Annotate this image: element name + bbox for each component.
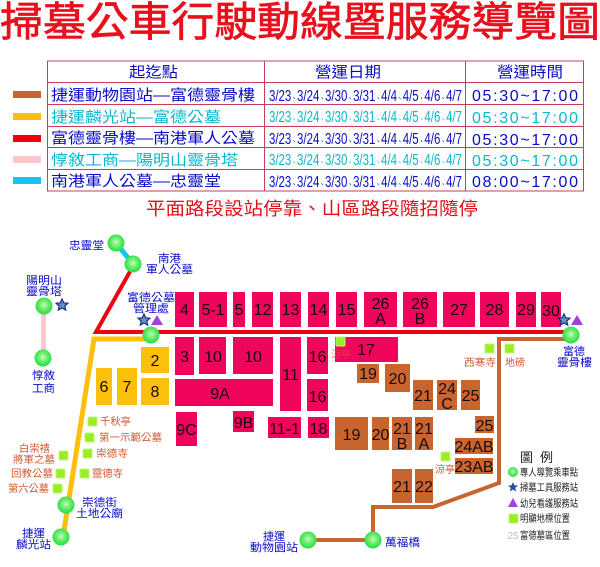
cemetery sections: pink: 3 <box>180 349 189 366</box>
landmark labels: 第六公墓 <box>8 482 49 495</box>
stop labels: 軍人公墓 <box>146 263 193 276</box>
cemetery sections: pink: 9B <box>234 415 253 432</box>
map legend <box>507 450 578 542</box>
cemetery sections: brown: 22 <box>415 479 433 496</box>
table row 1: 05:30~17:00 <box>472 88 578 105</box>
subtitle note: 平面路段設站停靠、山區路段隨招隨停 <box>146 199 478 219</box>
cemetery sections: pink: 4 <box>180 302 189 319</box>
cemetery sections: brown: 25 <box>476 418 494 435</box>
stop labels: 靈骨樓 <box>557 355 592 369</box>
route colour legend <box>13 91 41 184</box>
cemetery sections: pink: 26 <box>411 296 429 313</box>
cemetery sections: pink: 26 <box>372 296 390 313</box>
legend icon: section number: 25 <box>507 531 519 542</box>
landmark labels: 靈德寺 <box>92 467 123 480</box>
stop labels: 工商 <box>32 381 55 395</box>
cemetery sections: yellow: 8 <box>151 384 160 401</box>
table row 1 <box>51 86 578 105</box>
cemetery sections: pink: 16 <box>309 349 326 366</box>
cemetery sections: brown: 20 <box>389 371 406 388</box>
landmark labels: 千秋亭 <box>100 415 131 428</box>
stop labels: 富德公墓 <box>127 290 175 304</box>
legend icon: landmark <box>509 514 518 523</box>
landmark labels: 地磅 <box>505 356 525 369</box>
cemetery sections: brown: 20 <box>372 427 390 444</box>
table row 3: 3/23、3/24、3/30、3/31、4/4、4/5、4/6、4/7 <box>269 131 462 148</box>
service icons: stars and triangles <box>56 299 583 325</box>
cemetery sections: yellow <box>96 347 169 405</box>
table row 3 <box>51 129 578 149</box>
cemetery sections: pink: 10 <box>204 349 222 366</box>
cemetery sections: brown: 24AB <box>454 439 494 456</box>
cemetery sections: pink: 9A <box>210 386 230 403</box>
cemetery sections: pink: A <box>375 311 386 328</box>
stop labels: 靈骨塔 <box>26 285 62 298</box>
cemetery sections: yellow: 7 <box>123 379 132 396</box>
stop labels: 動物園站 <box>250 540 298 554</box>
table row 4: 惇敘工商—陽明山靈骨塔 <box>51 151 238 169</box>
stop labels: 土地公廟 <box>76 506 123 520</box>
table header: 營運時間 <box>497 64 563 81</box>
cemetery sections: pink <box>175 292 561 446</box>
cemetery sections: pink: 29 <box>517 302 535 319</box>
cemetery sections: pink: 11-1 <box>269 421 300 438</box>
cemetery sections: pink: 15 <box>338 302 356 319</box>
cemetery sections: yellow: 2 <box>151 353 160 370</box>
stop labels: 管理處 <box>133 301 169 315</box>
table header: 起迄點 <box>129 64 178 81</box>
landmark labels: 回教公墓 <box>11 467 53 480</box>
cemetery sections: pink: 14 <box>310 302 328 319</box>
cemetery sections: brown: 25 <box>462 388 480 405</box>
stop labels <box>16 239 592 554</box>
cemetery sections: pink: 28 <box>486 302 504 319</box>
legend text: section: 富德墓區位置 <box>520 529 570 542</box>
route lines <box>44 243 565 540</box>
cemetery sections: pink: 16 <box>309 389 326 406</box>
table header <box>129 64 563 81</box>
cemetery sections: brown: 21 <box>393 421 411 438</box>
cemetery sections: pink: 12 <box>254 302 272 319</box>
landmark labels: 第一示範公墓 <box>99 431 162 444</box>
cemetery sections: pink: 27 <box>450 302 468 319</box>
legend heading: 圖 例 <box>520 450 553 465</box>
cemetery sections: pink: 13 <box>282 302 300 319</box>
legend icon: stop <box>508 467 518 477</box>
table row 5: 08:00~17:00 <box>472 174 578 191</box>
cemetery sections: brown: A <box>419 436 430 453</box>
landmark labels: 崇德寺 <box>96 447 128 460</box>
cemetery sections: brown: 21 <box>393 479 411 496</box>
table row 2: 捷運麟光站—富德公墓 <box>51 108 221 126</box>
landmark labels: 將軍之墓 <box>13 453 55 466</box>
cemetery sections: pink: 30 <box>542 303 560 320</box>
cemetery sections: pink: 10 <box>244 349 262 366</box>
cemetery sections: pink: 5-1 <box>201 302 225 319</box>
table row 4: 3/23、3/24、3/30、3/31、4/4、4/5、4/6、4/7 <box>269 152 462 169</box>
cemetery sections: brown: 24 <box>438 381 456 398</box>
legend icon: star <box>508 482 518 491</box>
stop labels: 麟光站 <box>16 537 51 551</box>
table row 5: 南港軍人公墓—忠靈堂 <box>51 173 221 190</box>
legend text: triangle: 幼兒看護服務站 <box>520 497 578 510</box>
stop labels: 崇德街 <box>82 495 117 509</box>
cemetery sections: pink: 17 <box>357 342 375 359</box>
cemetery sections: brown <box>335 364 494 503</box>
landmark labels <box>8 348 525 495</box>
table row 2: 05:30~17:00 <box>472 110 578 127</box>
legend text: landmark: 明顯地標位置 <box>520 512 570 525</box>
table row 3: 富德靈骨樓—南港軍人公墓 <box>51 129 255 147</box>
table row 5: 3/23、3/24、3/30、3/31、4/4、4/5、4/6、4/7 <box>269 174 462 191</box>
landmark labels: 白崇禧 <box>19 442 50 455</box>
cemetery sections: brown: 21 <box>415 421 433 438</box>
landmark labels: 涼亭 <box>435 463 455 476</box>
stop labels: 陽明山 <box>26 274 62 287</box>
table row 4 <box>51 151 578 170</box>
schedule table <box>48 61 584 191</box>
cemetery sections: brown: 19 <box>343 427 360 444</box>
cemetery sections: brown: 19 <box>359 366 377 383</box>
table row 4: 05:30~17:00 <box>472 153 578 170</box>
table row 2: 3/23、3/24、3/30、3/31、4/4、4/5、4/6、4/7 <box>269 109 462 126</box>
stop labels: 捷運 <box>22 526 45 540</box>
table row 3: 05:30~17:00 <box>472 132 578 149</box>
cemetery sections: pink: 5 <box>235 302 244 319</box>
legend icon: triangle <box>508 498 518 507</box>
table row 1: 3/23、3/24、3/30、3/31、4/4、4/5、4/6、4/7 <box>269 88 462 105</box>
cemetery sections: brown: B <box>397 436 407 453</box>
stop labels: 惇敘 <box>32 368 55 382</box>
legend text: stop: 專人導覽乘車點 <box>520 466 578 479</box>
table header: 營運日期 <box>315 64 381 81</box>
legend text: star: 掃墓工具服務站 <box>520 481 578 494</box>
cemetery sections: pink: 18 <box>310 421 328 438</box>
landmark labels: 西寒寺 <box>464 356 496 369</box>
landmark markers <box>53 337 514 493</box>
stop labels: 富德 <box>563 344 585 358</box>
landmark labels: 涼亭 <box>331 348 351 361</box>
stop labels: 忠靈堂 <box>69 239 104 252</box>
bus stops <box>34 234 580 548</box>
cemetery sections: brown: 23AB <box>454 459 494 476</box>
title: 掃墓公車行駛動線暨服務導覽圖 <box>0 0 600 45</box>
stop labels: 南港 <box>158 252 181 265</box>
cemetery sections: yellow: 6 <box>100 379 109 396</box>
table row 1: 捷運動物園站—富德靈骨樓 <box>51 86 255 104</box>
stop labels: 萬福橋 <box>385 535 420 549</box>
cemetery sections: brown: C <box>441 396 453 413</box>
cemetery sections: pink: 9C <box>176 422 197 439</box>
cemetery sections: brown: 21 <box>414 388 432 405</box>
cemetery sections: pink: B <box>415 311 425 328</box>
table row 2 <box>51 108 578 127</box>
cemetery sections: pink: 11 <box>282 367 299 384</box>
stop labels: 捷運 <box>263 529 285 543</box>
table row 5 <box>51 173 578 191</box>
